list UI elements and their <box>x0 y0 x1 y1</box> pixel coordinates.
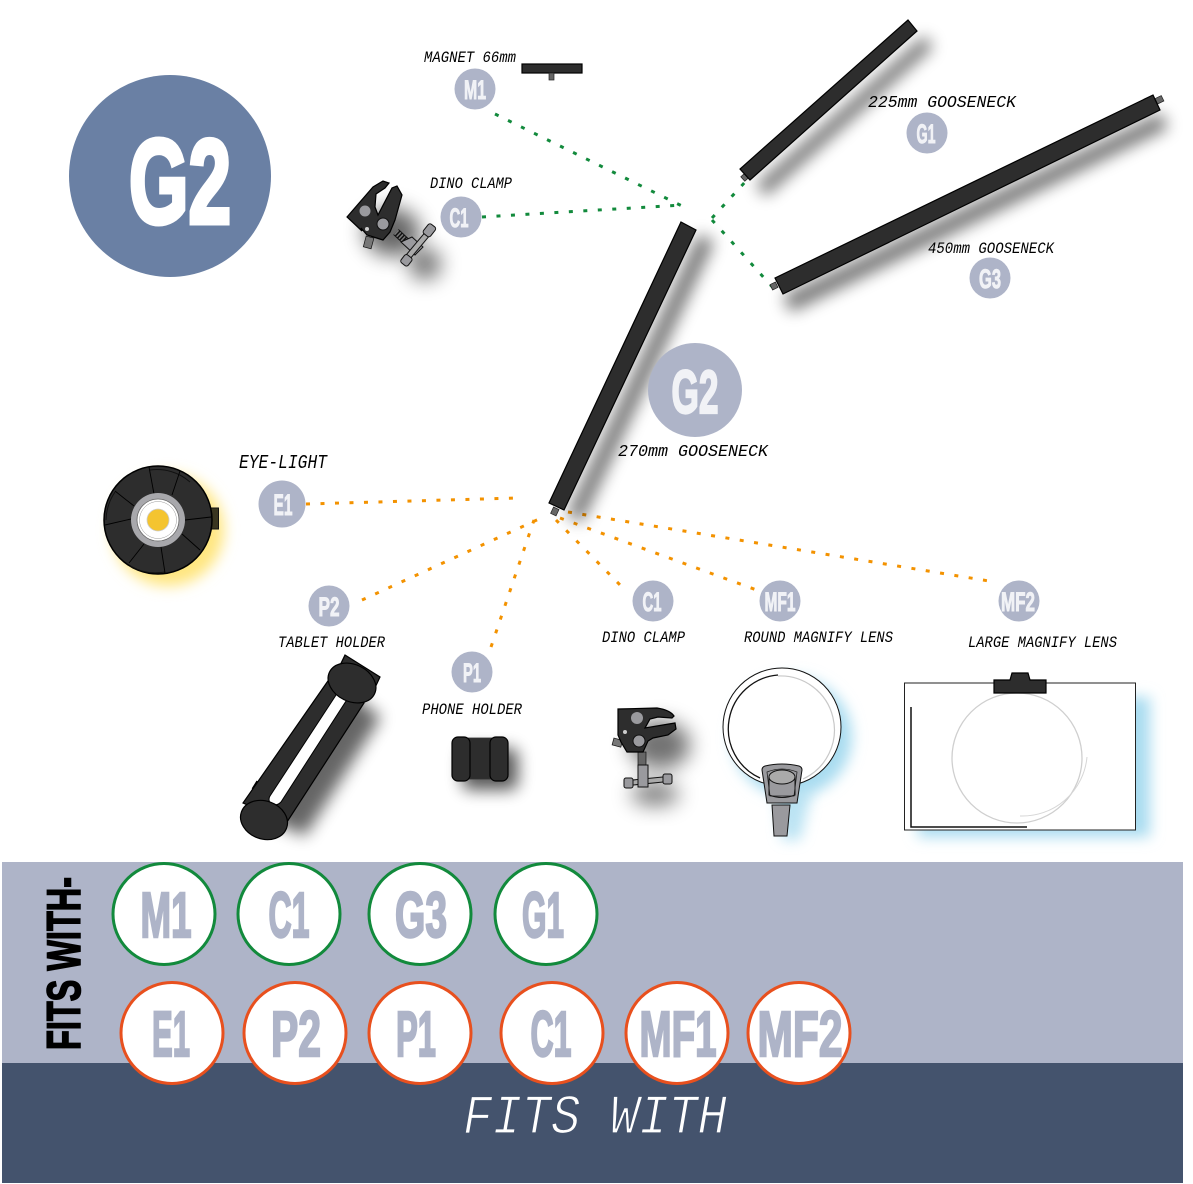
round magnify lens part <box>723 668 852 840</box>
badge P1: P1 <box>463 658 481 688</box>
badge P2: P2 <box>318 592 340 622</box>
badge G2 large: G2 <box>672 358 718 426</box>
badge E1: E1 <box>274 489 292 522</box>
badge C1 lower: C1 <box>642 587 662 617</box>
chips: green row: G3 <box>395 879 447 951</box>
label: dino clamp lower: DINO CLAMP <box>602 629 686 647</box>
badge C1 lower <box>632 580 674 622</box>
450mm gooseneck G3 <box>770 95 1168 312</box>
badge G1: G1 <box>916 119 936 149</box>
badge C1 upper: C1 <box>450 203 468 233</box>
eye-light part <box>104 466 224 586</box>
label: 270mm gooseneck: 270mm GOOSENECK <box>618 443 769 462</box>
label: magnet: MAGNET 66mm <box>424 49 516 67</box>
chips: orange row: MF1 <box>640 998 716 1070</box>
dino clamp lower <box>612 708 690 806</box>
fits-with band <box>2 862 1183 1183</box>
badge MF2: MF2 <box>1001 587 1035 617</box>
heading: fits with (vertical): FITS WITH- <box>37 877 90 1050</box>
label: tablet holder: TABLET HOLDER <box>278 634 386 652</box>
chips: green row: G1 <box>522 879 564 951</box>
label: 450mm gooseneck: 450mm GOOSENECK <box>928 240 1055 258</box>
label: phone holder: PHONE HOLDER <box>422 701 523 719</box>
badge C1 upper <box>440 196 482 238</box>
badge G1 <box>906 112 948 154</box>
chips: orange row: E1 <box>152 998 190 1070</box>
green connector lines <box>482 114 775 290</box>
orange connector lines <box>306 498 995 647</box>
badge G3: G3 <box>979 264 1001 294</box>
label: 225mm gooseneck: 225mm GOOSENECK <box>868 93 1017 112</box>
title badge G2 <box>69 75 271 277</box>
magnet 66mm part <box>522 64 582 80</box>
label: dino clamp upper: DINO CLAMP <box>430 175 512 193</box>
chips: green row: M1 <box>140 879 192 951</box>
chips: orange row: MF2 <box>758 998 842 1070</box>
phone holder part <box>452 737 518 790</box>
dino clamp upper <box>347 181 441 280</box>
badge MF1: MF1 <box>764 587 796 617</box>
title badge G2: G2 <box>129 115 231 249</box>
badge G2 large <box>648 343 742 437</box>
label: eye-light: EYE-LIGHT <box>239 452 328 474</box>
chips: green row: C1 <box>268 879 310 951</box>
chips: orange row: P1 <box>396 998 436 1070</box>
badge MF1 <box>760 580 800 622</box>
badge MF2 <box>998 580 1040 622</box>
badge M1 <box>454 68 496 110</box>
chips: orange row <box>121 982 850 1084</box>
tablet holder part <box>235 655 383 846</box>
badge E1 <box>258 480 306 528</box>
heading: fits with: FITS WITH <box>463 1086 727 1150</box>
chips: orange row: P2 <box>271 998 321 1070</box>
badge M1: M1 <box>464 75 486 105</box>
badge G3 <box>970 258 1010 298</box>
chips: orange row: C1 <box>530 998 572 1070</box>
label: round magnify lens: ROUND MAGNIFY LENS <box>744 629 894 647</box>
label: large magnify lens: LARGE MAGNIFY LENS <box>968 634 1118 652</box>
chips: green row <box>113 864 597 964</box>
badge P2 <box>308 586 350 626</box>
large magnify lens part <box>904 673 1150 837</box>
225mm gooseneck G1 <box>740 20 933 196</box>
badge P1 <box>452 652 492 692</box>
270mm gooseneck G2 <box>549 222 714 522</box>
